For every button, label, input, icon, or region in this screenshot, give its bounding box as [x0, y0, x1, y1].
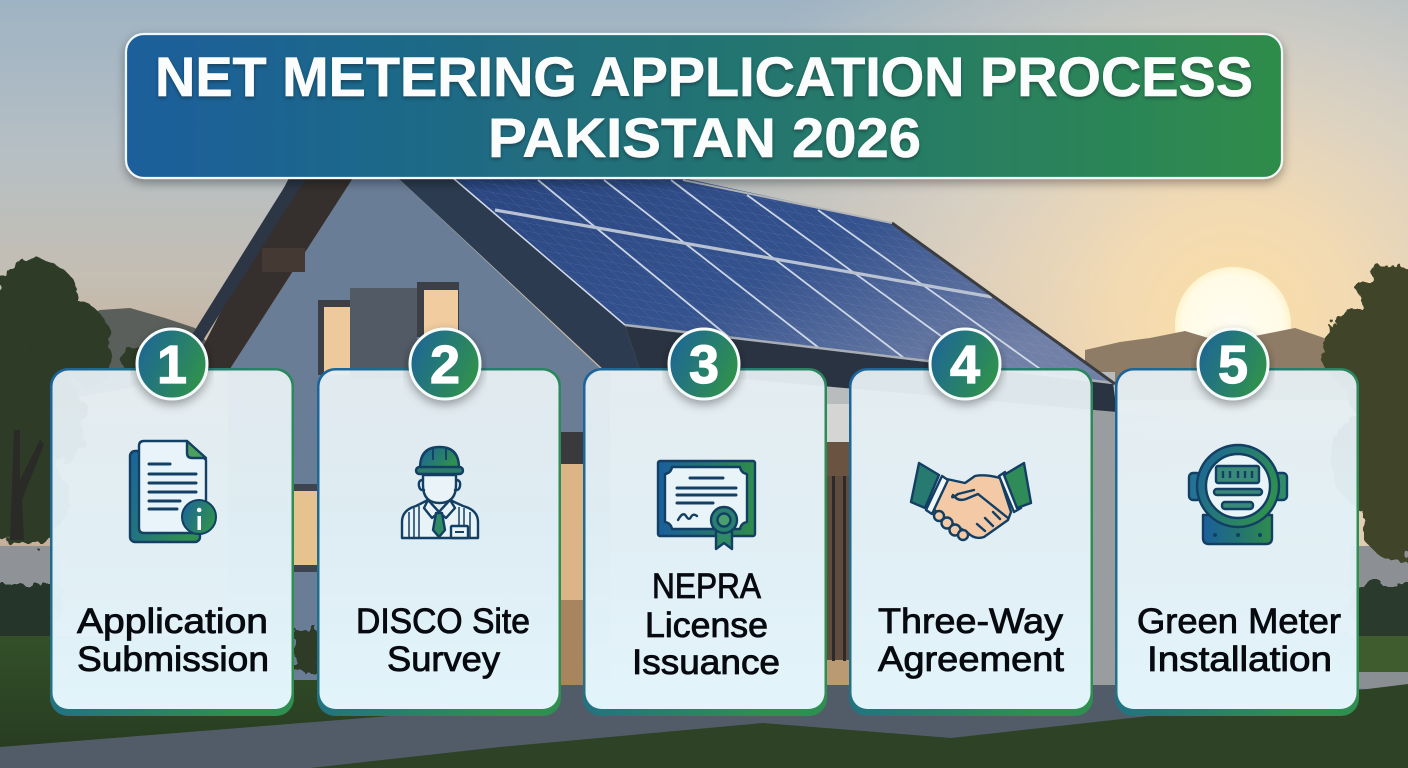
panel: step 3 NEPRA license issuance — [583, 329, 827, 716]
number badge 5 — [1198, 329, 1268, 399]
roof rake — [398, 178, 640, 370]
panel: step 2 DISCO site survey — [317, 329, 561, 716]
roof shingles — [625, 325, 1117, 412]
left roof edge — [190, 178, 353, 372]
step label — [878, 602, 1064, 679]
tree right — [1323, 265, 1408, 560]
step label — [77, 602, 269, 679]
icon: handshake — [911, 463, 1031, 540]
upper windows — [318, 282, 459, 378]
eave overhang — [1117, 412, 1175, 424]
number badge 1: 1 — [157, 335, 187, 395]
step label: License — [645, 606, 768, 645]
lawn — [0, 636, 1408, 768]
icon: document with info badge — [130, 441, 216, 542]
step label — [1137, 602, 1341, 679]
step label: Issuance — [632, 643, 780, 682]
card frame — [317, 368, 561, 716]
tree trunk left — [10, 430, 44, 540]
step label: Application — [77, 602, 268, 641]
panel: step 4 three-way agreement — [849, 329, 1093, 716]
number badge 4 — [930, 329, 1000, 399]
panel: step 1 application submission — [50, 329, 294, 716]
mountains — [60, 308, 1360, 400]
title banner — [126, 34, 1282, 178]
icon: certificate with seal — [658, 461, 755, 549]
icon: electric meter — [1189, 445, 1287, 544]
front lawn — [310, 684, 1408, 768]
step label: DISCO Site — [356, 602, 530, 641]
house wall — [228, 178, 1115, 688]
number badge 4: 4 — [950, 335, 980, 395]
card frame — [583, 368, 827, 716]
tree left — [0, 258, 149, 545]
step label: Three-Way — [878, 602, 1064, 641]
sun — [1175, 267, 1291, 383]
title text: NET METERING APPLICATION PROCESS — [155, 45, 1253, 108]
step label: Installation — [1147, 640, 1332, 679]
step label: Green Meter — [1137, 602, 1341, 641]
hedge under window — [294, 628, 318, 674]
number badge 3 — [669, 329, 739, 399]
title text: PAKISTAN 2026 — [488, 106, 921, 169]
number badge 1 — [137, 329, 207, 399]
step label — [356, 602, 530, 679]
card frame — [849, 368, 1093, 716]
icon: engineer with hard hat — [402, 447, 478, 538]
step label: Survey — [387, 640, 501, 679]
garden wall and hedges — [0, 546, 1408, 654]
stone path — [0, 685, 1408, 768]
number badge 3: 3 — [689, 335, 719, 395]
panel: step 5 green meter installation — [1115, 329, 1359, 716]
title text — [155, 45, 1253, 169]
number badge 2: 2 — [430, 335, 460, 395]
step label — [632, 567, 780, 682]
step label: NEPRA — [652, 567, 762, 606]
step label: Agreement — [878, 640, 1064, 679]
card frame — [1115, 368, 1359, 716]
number badge 2 — [410, 329, 480, 399]
solar panels — [453, 178, 1115, 384]
number badge 5: 5 — [1218, 335, 1248, 395]
lower windows and doors — [292, 372, 1117, 686]
card frame — [50, 368, 294, 716]
step label: Submission — [77, 640, 269, 679]
